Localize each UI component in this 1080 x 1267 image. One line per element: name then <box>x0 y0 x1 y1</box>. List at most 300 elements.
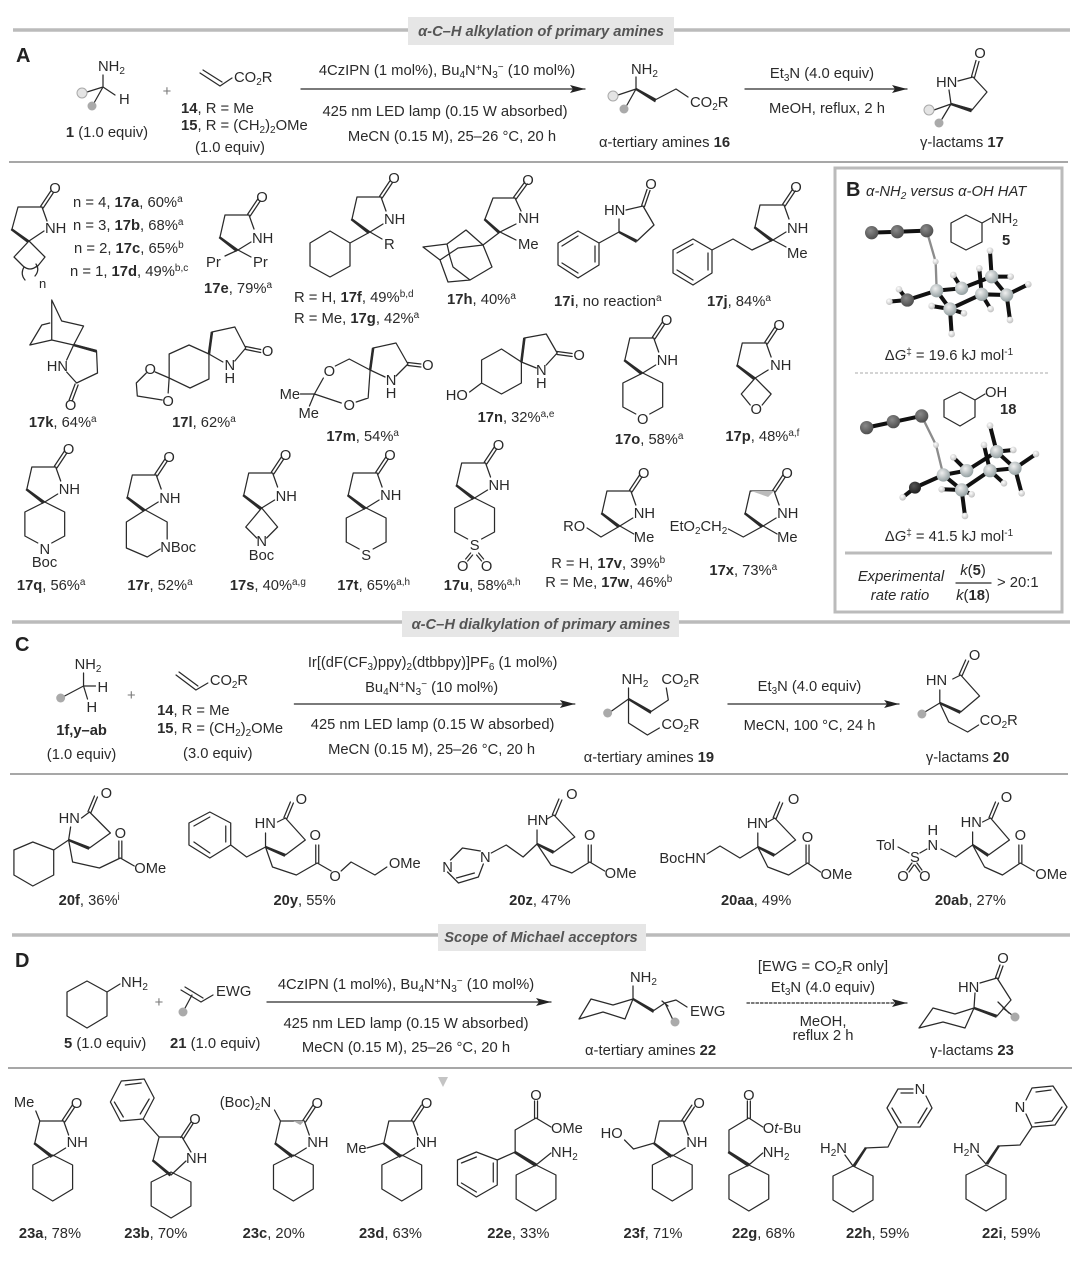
cyclohexylamine 5 <box>64 975 148 1052</box>
23a: NH <box>67 1135 88 1151</box>
17m: N <box>386 373 396 389</box>
20ab: O <box>1001 790 1012 806</box>
17v/w <box>545 466 673 591</box>
17m: Me <box>280 387 300 403</box>
17q: N <box>39 542 50 558</box>
panel: D reaction scheme <box>64 951 1020 1059</box>
dashed arrow with conditions: reflux 2 h <box>793 1028 853 1044</box>
acrylate: OMe <box>251 721 283 737</box>
arrow with conditions: 3 <box>451 984 457 995</box>
17v/w: Me <box>634 530 654 546</box>
17e: NH <box>252 231 273 247</box>
17s <box>230 448 306 594</box>
17h: a <box>510 291 516 302</box>
amines 16: α-tertiary amines 16 <box>599 135 730 151</box>
arrow with conditions: N <box>424 977 435 993</box>
panel: A reaction scheme <box>66 46 1004 156</box>
dashed arrow with conditions: R only] <box>842 959 888 975</box>
compound 1f,y-ab: H <box>87 700 97 716</box>
lactams 17: γ-lactams 17 <box>920 135 1004 151</box>
dashed arrow with conditions: N (4.0 equiv) <box>790 980 875 996</box>
compound 1f,y-ab: 2 <box>96 664 102 675</box>
reaction arrow and conditions: N <box>482 63 492 79</box>
17l: O <box>145 362 156 378</box>
experimental rate ratio: k(5) <box>960 563 986 579</box>
lactams 20: R <box>1007 713 1018 729</box>
17u: 17u, 58% <box>444 578 507 594</box>
17m: Me <box>298 406 319 422</box>
20y <box>189 792 421 909</box>
17u <box>444 438 521 594</box>
arrow 2 with conditions: Et <box>770 66 784 82</box>
17i: HN <box>604 203 625 219</box>
20z: N <box>442 860 453 876</box>
17o: NH <box>657 353 678 369</box>
17l: O <box>262 344 273 360</box>
lactams 20: 2 <box>1002 720 1008 731</box>
experimental rate ratio: rate ratio <box>871 588 929 604</box>
17f/g: b,d <box>400 289 414 300</box>
arrow with conditions: N <box>441 977 451 993</box>
dashed arrow with conditions: [EWG = CO <box>758 959 836 975</box>
22h: N <box>836 1141 847 1157</box>
17f/g: R = Me, 17g, 42% <box>294 311 414 327</box>
17s: 17s, 40% <box>230 578 292 594</box>
17a-d: b <box>178 240 184 251</box>
acrylate 14 15: 2 <box>270 125 276 136</box>
17l <box>136 327 273 431</box>
arrow with conditions: Bu <box>365 680 383 696</box>
20f: OMe <box>134 861 166 877</box>
arrow with conditions: MeCN (0.15 M), 25–26 °C, 20 h <box>302 1040 510 1056</box>
23f: NH <box>686 1135 707 1151</box>
20f: 20f, 36% <box>59 893 118 909</box>
arrow with conditions: (1 mol%) <box>494 655 557 671</box>
17a-d: n = 1, 17d, 49% <box>70 264 175 280</box>
17h: Me <box>518 237 539 253</box>
lactams 20: O <box>969 648 980 664</box>
experimental rate ratio: Experimental <box>858 569 945 585</box>
arrow with conditions: 4 <box>418 984 424 995</box>
23c: 2 <box>255 1102 261 1113</box>
17p: 17p, 48% <box>725 429 788 445</box>
amines 19: 2 <box>643 679 649 690</box>
22i: H <box>953 1141 964 1157</box>
acrylate 14 15: 2 <box>256 77 262 88</box>
substrate scope row 1 <box>11 171 808 327</box>
22h: H <box>820 1141 831 1157</box>
17a-d: NH <box>45 221 66 237</box>
17o <box>615 313 684 448</box>
lactams 23: O <box>997 951 1009 967</box>
17l: a <box>230 414 236 425</box>
17l: N <box>225 358 235 374</box>
experimental rate ratio <box>858 563 1039 604</box>
17e: O <box>256 190 268 206</box>
amines 19: R <box>689 672 700 688</box>
energy barrier 18: ‡ <box>906 528 912 539</box>
22h: N <box>915 1082 925 1098</box>
20z: HN <box>527 813 548 829</box>
reaction arrow and conditions <box>301 62 585 145</box>
20f: HN <box>59 811 80 827</box>
17s: NH <box>276 489 297 505</box>
17q: 17q, 56% <box>17 578 80 594</box>
23c <box>220 1095 329 1242</box>
17p <box>725 318 800 445</box>
23c: 23c, 20% <box>243 1226 305 1242</box>
small grey artefact <box>438 1077 448 1087</box>
arrow with conditions: )ppy) <box>373 655 407 671</box>
17k: HN <box>47 359 68 375</box>
acrylate <box>157 672 283 762</box>
17i: O <box>645 177 657 193</box>
20ab: O <box>897 869 909 885</box>
17a-d: a <box>177 194 183 205</box>
17x: a <box>772 562 778 573</box>
20ab: Tol <box>876 838 895 854</box>
arrow with conditions <box>294 655 575 758</box>
17v/w: b <box>667 574 673 585</box>
17x: O <box>781 466 793 482</box>
22h <box>820 1082 932 1242</box>
dashed arrow with conditions: MeOH, <box>800 1014 846 1030</box>
cyclohexanol 18: 18 <box>1000 402 1016 418</box>
17e: Pr <box>253 255 268 271</box>
energy barrier 18: ΔG <box>885 529 906 545</box>
17v/w: b <box>660 555 666 566</box>
cyclohexylamine 5: 5 <box>1002 233 1010 249</box>
17x: Me <box>777 530 798 546</box>
amines 16: 2 <box>712 102 718 113</box>
17a-d: n = 3, 17b, 68% <box>73 218 178 234</box>
compound 1: 2 <box>119 66 125 77</box>
23c: NH <box>307 1135 329 1151</box>
arrow 2 with conditions: Et <box>758 679 772 695</box>
acceptor 21: EWG <box>216 984 251 1000</box>
17k <box>29 300 98 431</box>
panel label A: A <box>16 45 30 67</box>
17u: NH <box>489 478 510 494</box>
20y: O <box>329 869 341 885</box>
17f/g: O <box>388 171 400 187</box>
acceptor 21: 21 (1.0 equiv) <box>170 1036 261 1052</box>
22g: O <box>743 1088 755 1104</box>
compound 1f,y-ab <box>47 657 116 763</box>
lactams 17: HN <box>936 75 957 91</box>
17l: H <box>225 371 235 387</box>
17u: S <box>470 538 480 554</box>
17u: a,h <box>507 577 521 588</box>
17q: O <box>63 442 74 458</box>
23c: O <box>312 1096 323 1112</box>
17h: NH <box>518 211 539 227</box>
17a-d <box>11 181 188 291</box>
dashed arrow with conditions <box>747 959 907 1044</box>
amines 19: α-tertiary amines 19 <box>584 750 714 766</box>
plus sign: + <box>127 688 136 704</box>
17h: O <box>522 173 534 189</box>
lactams 20: γ-lactams 20 <box>926 750 1009 766</box>
17x: CH <box>701 519 722 535</box>
amines 19: CO <box>661 717 683 733</box>
amines 22: NH <box>630 970 651 986</box>
arrow with conditions: 3 <box>416 687 422 698</box>
22i: 22i, 59% <box>982 1226 1040 1242</box>
17f/g: NH <box>384 212 405 228</box>
acrylate 14 15: 2 <box>260 125 266 136</box>
17m: a <box>393 428 399 439</box>
amines 16: R <box>718 95 728 111</box>
17p: O <box>773 318 785 334</box>
17r: NBoc <box>160 540 196 556</box>
17r <box>126 450 196 594</box>
20z: N <box>480 850 491 866</box>
17q <box>17 442 86 594</box>
arrow 2 with conditions <box>745 66 907 117</box>
20z: O <box>566 787 578 803</box>
20aa: O <box>802 830 813 846</box>
20aa: O <box>788 792 799 808</box>
plus sign: + <box>163 84 171 100</box>
17o: O <box>661 313 672 329</box>
17t: a,h <box>396 577 410 588</box>
17l: O <box>162 394 174 410</box>
17s: N <box>256 534 267 550</box>
17x: 2 <box>722 526 728 537</box>
lactams 20: HN <box>926 673 947 689</box>
experimental rate ratio: k(18) <box>956 588 990 604</box>
arrow with conditions: + <box>435 977 441 988</box>
compound 1: H <box>119 92 130 108</box>
22e: NH <box>551 1145 572 1161</box>
arrow with conditions: Ir[(dF(CF <box>308 655 367 671</box>
17e: Pr <box>206 255 221 271</box>
17a-d: n <box>39 276 46 291</box>
20ab: 20ab, 27% <box>935 893 1006 909</box>
17q: Boc <box>32 555 57 571</box>
23d: O <box>421 1096 432 1112</box>
20z: O <box>584 828 595 844</box>
arrow 2 with conditions: N (4.0 equiv) <box>777 679 861 695</box>
23d: 23d, 63% <box>359 1226 422 1242</box>
energy barrier 5: ΔG <box>885 348 906 364</box>
amines 19: R <box>689 717 700 733</box>
22e: 2 <box>572 1152 578 1163</box>
arrow 2 with conditions: N (4.0 equiv) <box>789 66 874 82</box>
17k: O <box>65 398 76 414</box>
compound 1f,y-ab: H <box>97 680 108 696</box>
arrow 2 with conditions: 3 <box>772 686 778 697</box>
energy barrier 5: ‡ <box>906 347 912 358</box>
17x: EtO <box>670 519 695 535</box>
17t <box>337 448 410 594</box>
lactams 20: CO <box>980 713 1002 729</box>
dashed arrow with conditions: Et <box>771 980 785 996</box>
22e <box>457 1088 583 1242</box>
reaction arrow and conditions: 3 <box>492 70 498 81</box>
17i: a <box>656 293 662 304</box>
17t: 17t, 65% <box>337 578 396 594</box>
23a: 23a, 78% <box>19 1226 81 1242</box>
dialkylation scope row <box>14 786 1067 909</box>
20aa: BocHN <box>659 851 706 867</box>
arrow 2 with conditions: MeCN, 100 °C, 24 h <box>744 718 875 734</box>
20z: OMe <box>605 866 637 882</box>
compound 1f,y-ab: (1.0 equiv) <box>47 747 116 763</box>
lactams 20 <box>917 648 1018 766</box>
17j: NH <box>787 221 808 237</box>
17q: a <box>80 577 86 588</box>
22i: N <box>969 1141 980 1157</box>
acrylate: 2 <box>232 680 238 691</box>
acrylate: 2 <box>235 728 241 739</box>
acrylate: 2 <box>246 728 252 739</box>
23b: 23b, 70% <box>124 1226 187 1242</box>
arrow with conditions: 425 nm LED lamp (0.15 W absorbed) <box>311 717 554 733</box>
lactams 23 <box>919 951 1020 1059</box>
20ab: OMe <box>1035 867 1067 883</box>
17m: 17m, 54% <box>326 429 393 445</box>
17f/g <box>294 171 420 327</box>
17a-d: b,c <box>175 263 188 274</box>
20ab: O <box>919 869 931 885</box>
acrylate 14 15: ) <box>265 118 270 134</box>
17v/w: RO <box>563 519 585 535</box>
arrow with conditions: (10 mol%) <box>463 977 534 993</box>
Michael acceptor scope row <box>14 1079 1067 1242</box>
panel label D: D <box>15 950 29 972</box>
20y: O <box>310 828 321 844</box>
17m <box>280 343 434 445</box>
22g: NH <box>763 1145 784 1161</box>
17h: 17h, 40% <box>447 292 510 308</box>
22h: 2 <box>831 1148 837 1159</box>
17h <box>423 173 539 308</box>
acrylate 14 15 <box>181 70 308 156</box>
17n: N <box>536 363 547 379</box>
22e: O <box>530 1088 542 1104</box>
arrow with conditions: 4 <box>383 687 389 698</box>
amines 16: 2 <box>652 69 658 80</box>
arrow with conditions: (dtbbpy)]PF <box>412 655 489 671</box>
arrow 2 with conditions: 3 <box>784 73 790 84</box>
17m: O <box>324 364 335 380</box>
17n: 17n, 32% <box>478 410 541 426</box>
23a: Me <box>14 1095 34 1111</box>
20ab: HN <box>961 815 982 831</box>
20ab: S <box>910 850 920 866</box>
lactams 23: γ-lactams 23 <box>930 1043 1014 1059</box>
17r: a <box>187 577 193 588</box>
amines 19: 2 <box>683 724 689 735</box>
section header: alpha C-H alkylation: α-C–H alkylation of primary amines <box>418 24 664 40</box>
23b: NH <box>186 1151 207 1167</box>
compound 1: 1 (1.0 equiv) <box>66 125 148 141</box>
20f: i <box>118 892 120 903</box>
acrylate: R <box>237 673 248 689</box>
17o: O <box>637 412 648 428</box>
17f/g: R = H, 17f, 49% <box>294 290 400 306</box>
20f: O <box>115 826 126 842</box>
acceptor 21 <box>170 984 261 1052</box>
20f <box>14 786 166 909</box>
20y: OMe <box>389 856 421 872</box>
17o: 17o, 58% <box>615 432 678 448</box>
cyclohexylamine 5: 2 <box>1012 218 1018 229</box>
17n: a,e <box>541 409 555 420</box>
acrylate: 15, R = (CH <box>157 721 235 737</box>
17x: 2 <box>695 526 701 537</box>
17n: O <box>573 348 585 364</box>
panel: C reaction scheme <box>47 648 1018 766</box>
17f/g: a <box>414 310 420 321</box>
17x: 17x, 73% <box>709 563 772 579</box>
22i: N <box>1015 1100 1025 1116</box>
acrylate 14 15: OMe <box>276 118 308 134</box>
23d <box>346 1096 437 1242</box>
section header: alpha C-H alkylation <box>13 17 1070 45</box>
amines 22: EWG <box>690 1004 725 1020</box>
20z: 20z, 47% <box>509 893 571 909</box>
arrow with conditions: 4CzIPN (1 mol%), Bu <box>278 977 418 993</box>
section header: Michael acceptors <box>12 924 1070 951</box>
panel B: NH2 versus OH HAT <box>835 168 1062 612</box>
17s: Boc <box>249 548 274 564</box>
23b <box>110 1079 207 1242</box>
acrylate 14 15: CO <box>234 70 256 86</box>
compound 1f,y-ab: 1f,y–ab <box>56 723 107 739</box>
amines 22 <box>579 970 725 1059</box>
section header: dialkylation <box>12 611 1070 637</box>
reaction arrow and conditions: 425 nm LED lamp (0.15 W absorbed) <box>322 104 568 120</box>
20aa: 20aa, 49% <box>721 893 791 909</box>
17x: NH <box>777 506 798 522</box>
compound 1: NH <box>98 59 119 75</box>
reaction arrow and conditions: + <box>476 63 482 74</box>
cyclohexanol 18: OH <box>985 385 1007 401</box>
acrylate: (3.0 equiv) <box>183 746 253 762</box>
17t: S <box>361 548 371 564</box>
acrylate 14 15: 15, R = (CH <box>181 118 260 134</box>
20ab: H <box>928 823 938 839</box>
20y: HN <box>255 816 276 832</box>
arrow with conditions <box>267 976 551 1056</box>
17j <box>673 180 808 310</box>
plus sign: + <box>155 995 163 1011</box>
17s: O <box>280 448 291 464</box>
22e: OMe <box>551 1121 583 1137</box>
3D model: transition state 18 <box>860 409 1039 519</box>
22e: 22e, 33% <box>487 1226 549 1242</box>
17j: Me <box>787 246 808 262</box>
23d: Me <box>346 1141 367 1157</box>
17r: 17r, 52% <box>127 578 187 594</box>
arrow with conditions: 3 <box>367 662 373 673</box>
22i <box>953 1086 1067 1242</box>
17u: O <box>493 438 504 454</box>
17k: 17k, 64% <box>29 415 91 431</box>
23c: (Boc) <box>220 1095 255 1111</box>
23f: HO <box>601 1126 623 1142</box>
arrow with conditions: N <box>405 680 416 696</box>
cyclohexylamine 5: 5 (1.0 equiv) <box>64 1036 146 1052</box>
arrow with conditions: 2 <box>407 662 413 673</box>
acrylate: ) <box>241 721 246 737</box>
17s: a,g <box>292 577 306 588</box>
17o: a <box>678 431 684 442</box>
cyclohexylamine 5: NH <box>121 975 142 991</box>
